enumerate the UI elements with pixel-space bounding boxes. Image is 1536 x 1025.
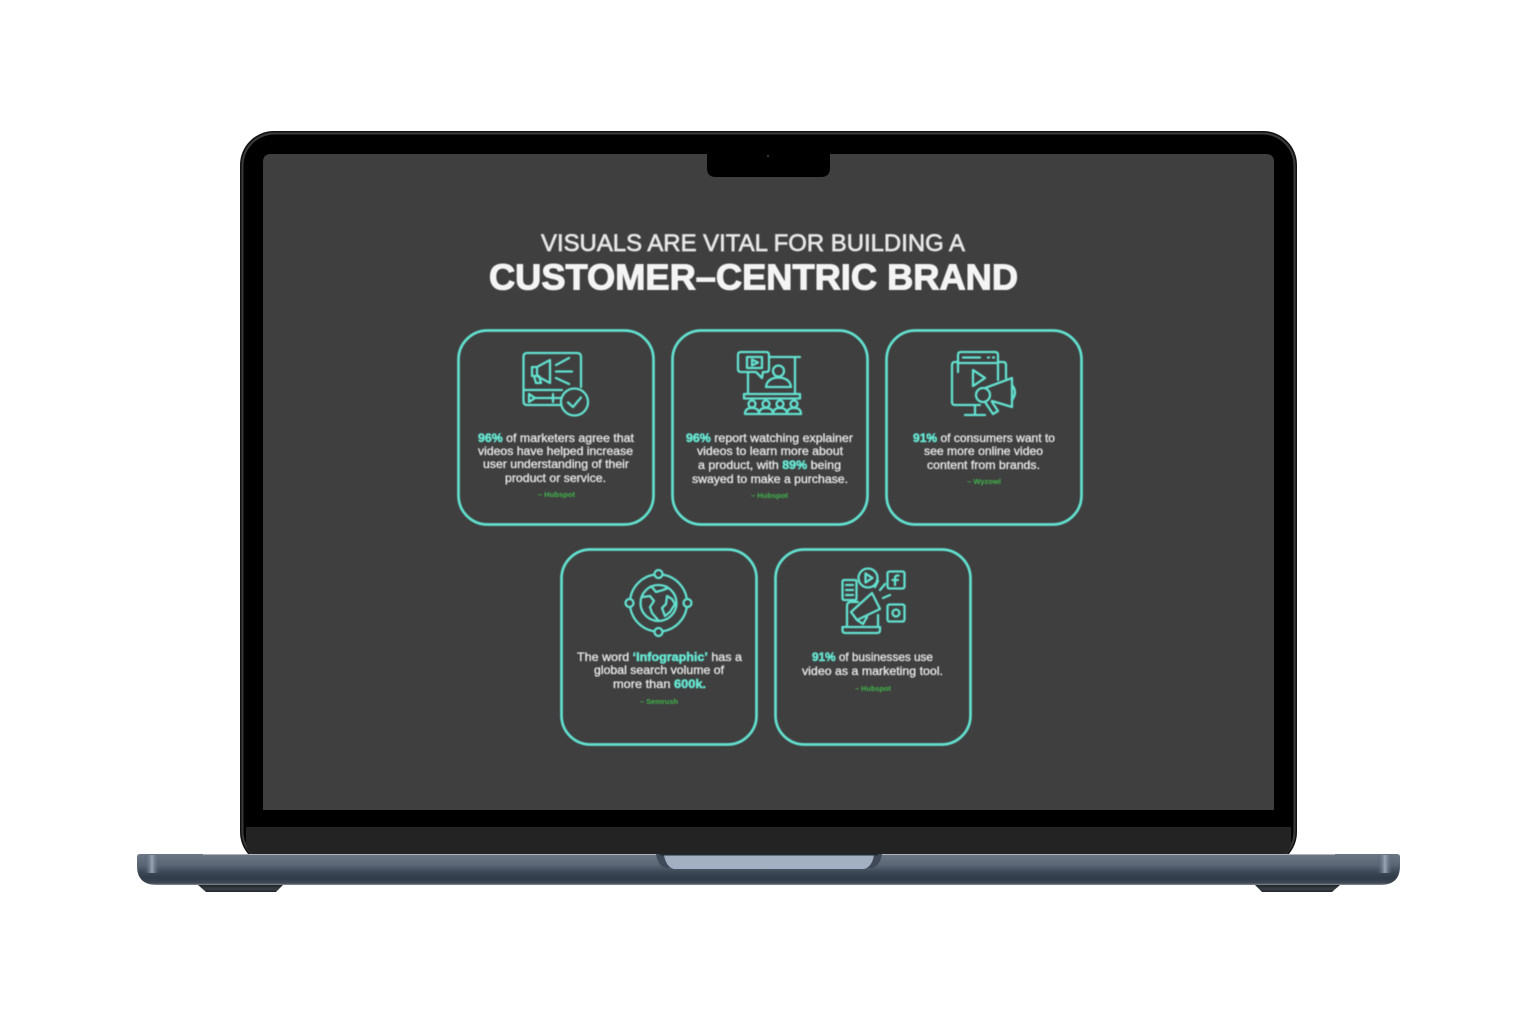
laptop hinge cutout [656, 854, 882, 869]
stat text: 91% of consumers want to [913, 431, 1055, 445]
panel: marketers stat [458, 330, 654, 524]
source: – Wyzowl [967, 479, 1001, 486]
camera notch [707, 153, 830, 177]
laptop base [137, 854, 1400, 885]
title [489, 230, 1018, 298]
source: – Hubspot [855, 686, 892, 693]
stat text [686, 431, 853, 486]
stat text [802, 650, 943, 678]
screen [263, 154, 1274, 810]
laptop feet [198, 885, 1340, 892]
stat text: 91% of businesses use [812, 650, 933, 664]
stat text: content from brands. [927, 458, 1040, 472]
source: – Semrush [640, 699, 678, 706]
icon: social media megaphone on laptop [842, 568, 904, 633]
stat text: The word ‘Infographic’ has a [577, 650, 742, 664]
panel: consumers stat [886, 330, 1082, 524]
stat text: a product, with 89% being [698, 458, 841, 472]
laptop lid [240, 131, 1297, 866]
stat text: videos to learn more about [697, 444, 844, 458]
stat text: 96% of marketers agree that [478, 431, 635, 445]
title: VISUALS ARE VITAL FOR BUILDING A [541, 230, 966, 257]
panel: businesses stat [776, 550, 970, 744]
stat text: 96% report watching explainer [686, 431, 853, 445]
source: – Hubspot [751, 493, 789, 500]
stat text: more than 600k. [613, 677, 706, 691]
stat text: product or service. [505, 471, 606, 485]
stat text: swayed to make a purchase. [692, 472, 848, 486]
stat text [577, 650, 742, 691]
icon: video window and megaphone [952, 352, 1015, 415]
stat text [478, 431, 635, 485]
source: – Hubspot [538, 492, 576, 499]
icon: globe with orbit [626, 570, 692, 636]
stat text: see more online video [924, 444, 1043, 458]
panel: explainer videos stat [672, 330, 868, 524]
stat text: videos have helped increase [478, 444, 633, 458]
stat text [913, 431, 1055, 472]
icon: presenter and audience [738, 352, 801, 414]
stat text: user understanding of their [483, 457, 629, 471]
icon: video marketing with check [524, 353, 588, 416]
title: CUSTOMER–CENTRIC BRAND [489, 256, 1018, 298]
stat text: global search volume of [594, 663, 725, 677]
stat text: video as a marketing tool. [802, 664, 943, 678]
panel: infographic search volume [562, 550, 756, 744]
